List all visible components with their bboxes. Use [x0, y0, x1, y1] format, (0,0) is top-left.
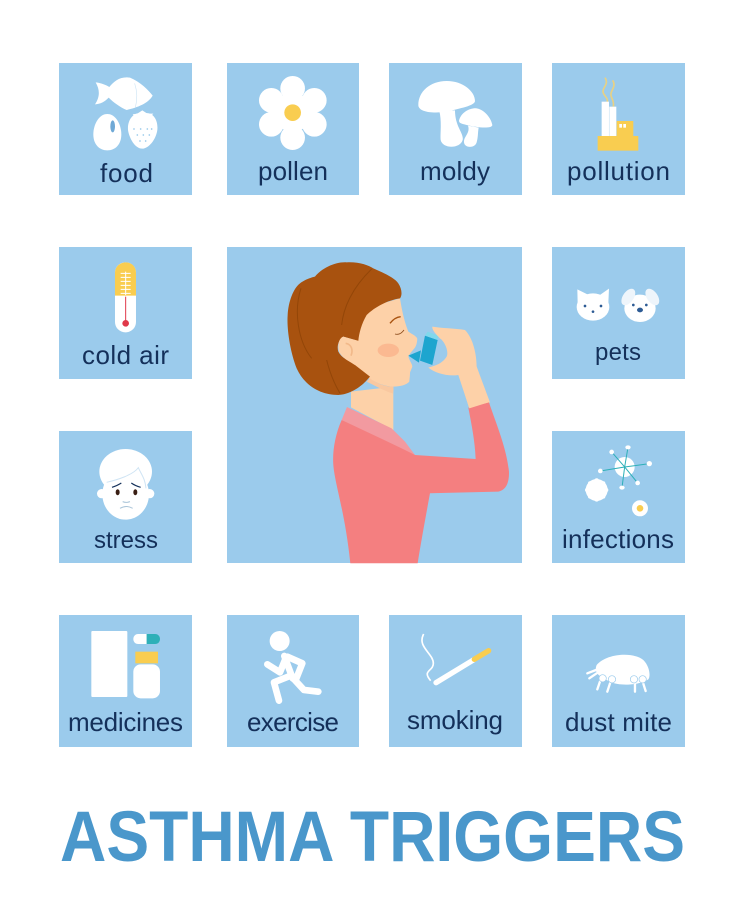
panel: exercise	[227, 615, 359, 747]
panel: pollution	[552, 63, 685, 195]
icon: fish, egg and strawberry	[93, 77, 157, 150]
panel: stress	[59, 431, 192, 563]
panel: pollen	[227, 63, 359, 195]
panel: medicines	[59, 615, 192, 747]
label: stress: stress	[94, 527, 158, 554]
panel: pets	[552, 247, 685, 379]
icon: viruses and bacteria	[585, 445, 652, 516]
label: exercise: exercise	[247, 707, 339, 737]
panel: food	[59, 63, 192, 195]
label: food: food	[100, 158, 153, 188]
panel: smoking	[389, 615, 522, 747]
icon: worried face	[97, 449, 154, 520]
icon: cat and dog	[577, 286, 662, 322]
icon: thermometer	[115, 262, 136, 332]
label: dust mite: dust mite	[565, 707, 672, 737]
panel: moldy	[389, 63, 522, 195]
label: infections: infections	[562, 524, 674, 554]
icon: cigarette	[422, 634, 489, 683]
icon: medicine box, capsule and bottle	[91, 631, 160, 698]
label: pollen: pollen	[258, 156, 328, 186]
title: ASTHMA TRIGGERS	[60, 798, 685, 877]
icon: mushrooms	[418, 81, 492, 147]
illustration: woman with inhaler	[287, 262, 509, 563]
panel: woman using inhaler	[227, 247, 522, 563]
label: pollution: pollution	[567, 156, 670, 186]
label: medicines: medicines	[68, 707, 183, 737]
icon: factory	[598, 78, 638, 151]
panel: dust mite	[552, 615, 685, 747]
label: cold air: cold air	[82, 340, 169, 370]
panel: cold air	[59, 247, 192, 379]
icon: flower	[259, 76, 327, 150]
label: pets: pets	[595, 339, 641, 366]
icon: runner	[267, 631, 318, 701]
panel: infections	[552, 431, 685, 563]
label: smoking: smoking	[407, 705, 503, 735]
label: moldy: moldy	[420, 156, 490, 186]
icon: dust mite	[587, 655, 650, 692]
